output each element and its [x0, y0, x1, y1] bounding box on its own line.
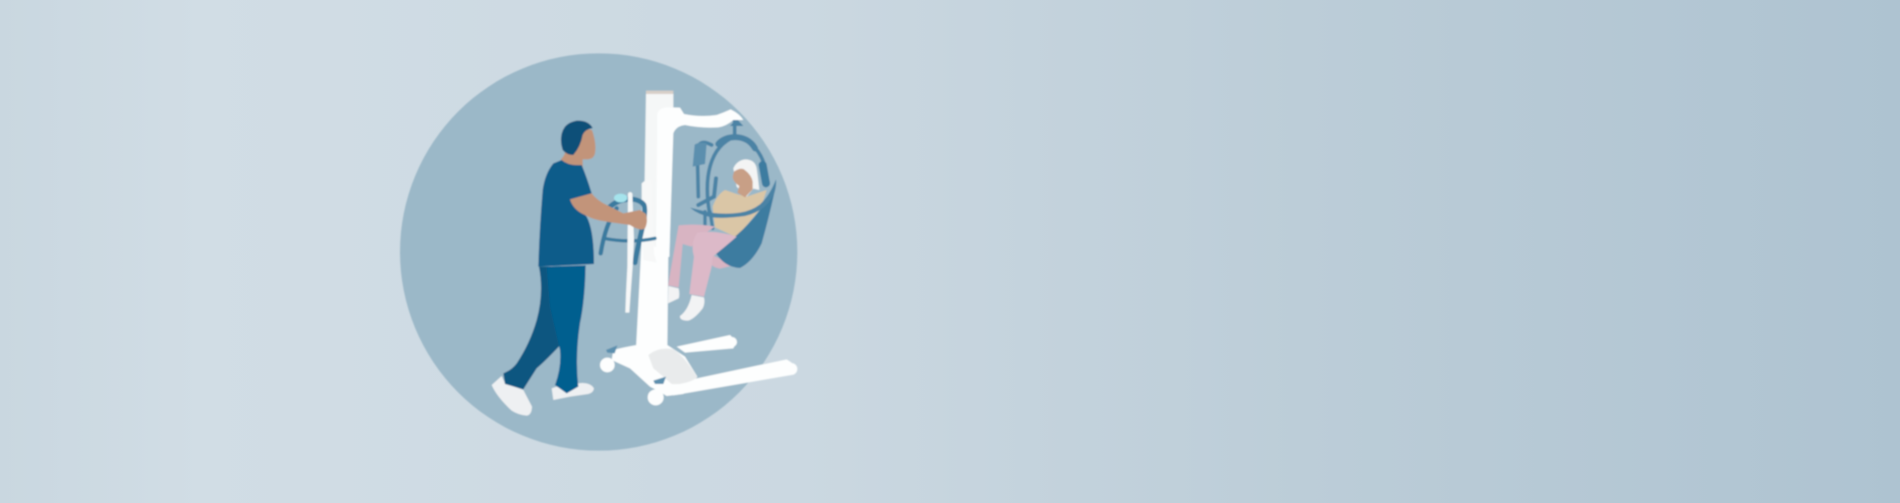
hair: [561, 121, 593, 155]
neck and head: [561, 129, 595, 168]
back leg: [503, 267, 565, 389]
glow on control: [614, 194, 627, 202]
mast upper: [643, 94, 673, 262]
hair: [733, 159, 759, 197]
hanger top arrow: [730, 119, 743, 126]
lower body under seat: [711, 255, 735, 269]
upper base leg: [677, 335, 737, 353]
boom arm: [656, 107, 743, 263]
circle backdrop: [400, 53, 797, 451]
front leg: [547, 265, 586, 393]
rear wheel: [600, 358, 615, 372]
near thigh and leg: [689, 232, 737, 297]
front shoe: [552, 383, 594, 400]
handle post: [642, 180, 657, 263]
face: [733, 169, 753, 197]
caregiver: [492, 121, 647, 416]
front brake pedal: [653, 377, 666, 384]
sling seat: [714, 190, 775, 268]
patient in sling: [668, 119, 776, 321]
sling strap: [690, 179, 776, 218]
arm and hand: [570, 193, 647, 229]
near sock: [680, 295, 704, 321]
patient lift: [606, 91, 797, 396]
rear brake pedal: [606, 345, 617, 353]
mast lower: [636, 240, 668, 348]
back shoe: [492, 376, 532, 416]
front wheel: [648, 389, 664, 405]
sweater: [713, 190, 767, 237]
mast cap: [646, 91, 673, 95]
hanging control box: [693, 143, 707, 167]
far sock: [668, 286, 679, 303]
sling hanger: [697, 120, 766, 228]
hand control cable: [625, 192, 634, 313]
lower base leg: [673, 359, 797, 395]
control handle frame: [601, 199, 655, 263]
rear base: [612, 345, 697, 396]
far leg: [668, 225, 715, 287]
shirt: [538, 160, 594, 267]
base housing: [648, 349, 697, 384]
